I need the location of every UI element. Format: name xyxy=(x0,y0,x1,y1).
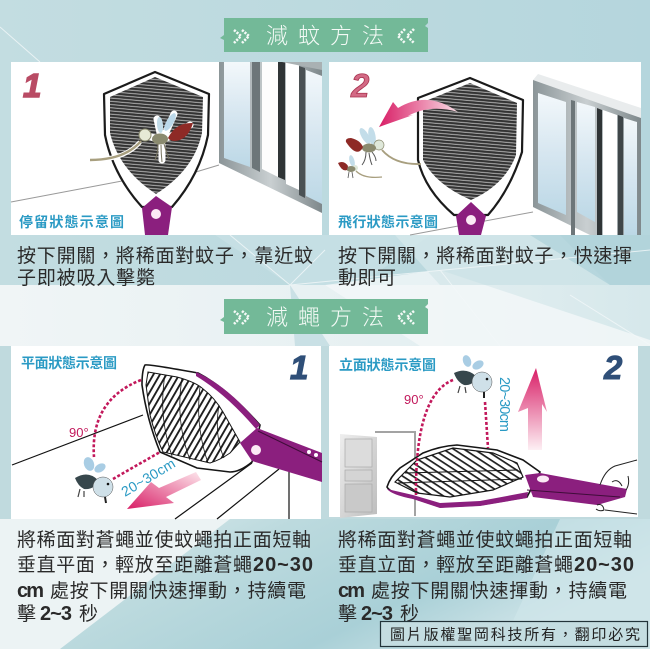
text: fly step 2: 擊 xyxy=(338,603,357,625)
numeral 2: 2 xyxy=(350,67,370,104)
banner: 滅蚊方法 xyxy=(220,18,428,52)
caption: 飛行狀態示意圖 xyxy=(338,214,438,230)
icon: mosquito xyxy=(90,112,193,162)
text: fly step 2: 20~30 xyxy=(574,554,634,576)
text: fly step 1: 垂直平面，輕放至距離蒼蠅 xyxy=(17,554,252,576)
icon: left chevrons xyxy=(234,311,249,324)
text: fly step 1: 秒 xyxy=(79,603,98,625)
text: fly step 2: 將稀面對蒼蠅並使蚊蠅拍正面短軸 xyxy=(338,529,632,551)
racket: shield head and handle xyxy=(104,72,209,235)
icon: right chevrons xyxy=(398,311,414,324)
text: fly step 1: 2~3 xyxy=(40,603,72,625)
arrow xyxy=(127,472,201,509)
racket: flat view with hand xyxy=(387,445,637,514)
panel: mosquito flying xyxy=(329,62,641,235)
text: fly step 2 xyxy=(338,529,634,625)
copyright box: 圖片版權聖岡科技所有，翻印必究 xyxy=(390,626,640,644)
window xyxy=(533,74,641,235)
label distance: 20~30cm xyxy=(118,455,178,500)
banner heading text: 蚊 xyxy=(298,24,320,48)
numeral 2: 2 xyxy=(603,349,623,386)
text: fly step 1: 擊 xyxy=(17,603,36,625)
banner heading text: 法 xyxy=(362,24,384,48)
racket: shield head and handle xyxy=(418,78,523,235)
text: fly step 2: 2~3 xyxy=(361,603,393,625)
label 90 degrees: 90° xyxy=(404,392,424,407)
banner heading text: 蠅 xyxy=(298,305,320,330)
banner heading text: 減 xyxy=(266,305,288,330)
icon: large mosquito xyxy=(346,126,421,165)
banner: 滅蠅方法 xyxy=(220,299,428,334)
panel: fly vertical xyxy=(329,346,638,518)
panel: mosquito resting xyxy=(11,62,322,235)
door xyxy=(340,432,415,518)
icon: left chevrons xyxy=(234,30,249,43)
caption: 立面狀態示意圖 xyxy=(339,357,436,373)
text: mosquito step 2: 按下開關，將稀面對蚊子，快速揮 xyxy=(338,245,632,267)
numeral 1: 1 xyxy=(23,67,41,104)
icon: right chevrons xyxy=(398,29,414,43)
text: fly step 1: 處按下開關快速揮動，持續電 xyxy=(50,580,306,602)
copyright box xyxy=(380,622,648,646)
numeral 1: 1 xyxy=(290,349,308,386)
text: fly step 1 xyxy=(17,529,313,625)
text: fly step 1: cm xyxy=(17,580,44,602)
dotted arcs xyxy=(416,380,488,495)
icon: fly xyxy=(75,456,113,503)
text: mosquito step 1: 子即被吸入擊斃 xyxy=(17,267,155,289)
text: fly step 2: cm xyxy=(338,580,365,602)
panel: fly flat xyxy=(11,346,322,519)
text: fly step 2: 秒 xyxy=(400,603,419,625)
racket: side view xyxy=(142,365,322,482)
icon: small mosquito xyxy=(338,155,382,178)
text: fly step 1: 將稀面對蒼蠅並使蚊蠅拍正面短軸 xyxy=(17,529,311,551)
caption: 平面狀態示意圖 xyxy=(21,355,117,371)
banner heading text: 方 xyxy=(330,305,352,330)
icon: fly xyxy=(454,354,492,398)
label distance: 20~30cm xyxy=(496,377,512,432)
text: mosquito step 1: 按下開關，將稀面對蚊子，靠近蚊 xyxy=(17,245,313,267)
label 90 degrees: 90° xyxy=(69,425,89,440)
banner heading text: 法 xyxy=(362,305,384,330)
text: fly step 2: 處按下開關快速揮動，持續電 xyxy=(371,580,627,602)
dotted arcs xyxy=(94,380,160,479)
arrow xyxy=(518,368,547,450)
text: mosquito step 2: 動即可 xyxy=(338,267,396,289)
text: fly step 1: 20~30 xyxy=(253,554,313,576)
banner heading text: 減 xyxy=(266,24,288,48)
banner heading text: 方 xyxy=(330,24,352,48)
arrow xyxy=(379,100,458,127)
text: fly step 2: 垂直立面，輕放至距離蒼蠅 xyxy=(338,554,573,576)
caption: 停留狀態示意圖 xyxy=(19,214,124,230)
window xyxy=(219,62,322,213)
